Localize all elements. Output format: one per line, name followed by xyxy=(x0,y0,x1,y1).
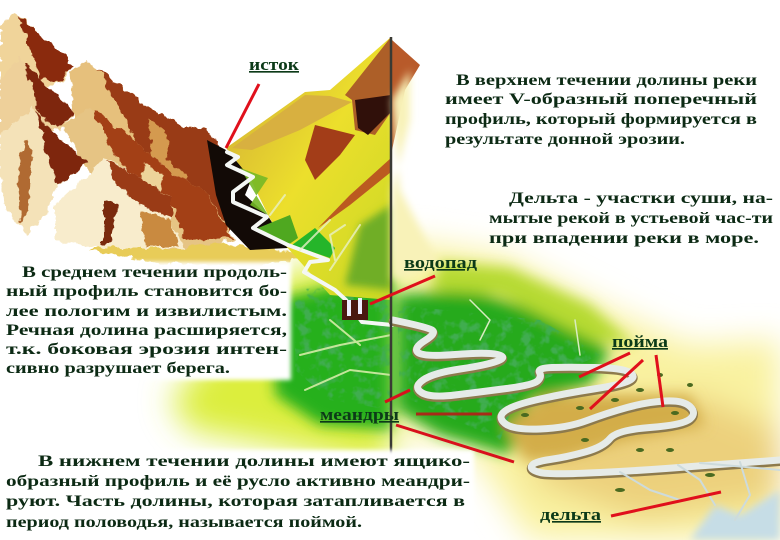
text: upper course xyxy=(445,72,757,148)
text: middle course: т.к. боковая эрозия интен- xyxy=(6,341,287,358)
text: upper course: результате донной эрозии. xyxy=(445,131,685,148)
panel backgrounds for text xyxy=(0,262,474,540)
slope rock faces xyxy=(345,37,391,135)
arrows: пойма xyxy=(579,353,663,409)
foothills xyxy=(90,232,320,268)
label: водопад: водопад xyxy=(404,253,478,272)
text: lower course xyxy=(6,453,470,531)
label: исток: исток xyxy=(249,55,300,74)
label: пойма: пойма xyxy=(612,332,668,351)
peak 3 xyxy=(0,108,90,235)
text: lower course: руют. Часть долины, которая затапливается в xyxy=(6,493,465,510)
waterfall xyxy=(342,298,368,320)
text: middle course: ный профиль становится бо- xyxy=(6,283,287,300)
river: upper course xyxy=(227,152,392,325)
gorge shadow xyxy=(207,140,288,250)
text: delta: Дельта - участки суши, на- xyxy=(509,190,773,207)
green terraces xyxy=(240,168,268,215)
river xyxy=(227,152,780,520)
text: upper course: В верхнем течении долины реки xyxy=(456,72,757,89)
right ridge xyxy=(226,37,391,300)
right slopes xyxy=(226,37,391,300)
front range xyxy=(55,158,185,248)
sea xyxy=(690,490,780,540)
text: delta: мытые рекой в устьевой час-ти xyxy=(489,210,773,227)
arrow: дельта xyxy=(611,492,721,516)
label: дельта: дельта xyxy=(540,505,601,524)
text: middle course: сивно разрушает берега. xyxy=(6,360,230,377)
text: lower course: образный профиль и её русло активно меандри- xyxy=(6,473,470,490)
text: delta xyxy=(489,190,773,247)
peak right of divider xyxy=(392,40,420,150)
text: middle course: В среднем течении продоль- xyxy=(22,264,287,281)
text: lower course: период половодья, называется поймой. xyxy=(6,514,362,531)
river: lower course shadow xyxy=(393,322,780,475)
arrow: водопад xyxy=(370,276,435,304)
shrubs on the floodplain xyxy=(521,373,715,492)
text: upper course: профиль, который формируется в xyxy=(445,111,757,128)
second back range xyxy=(62,108,235,250)
text: middle course: Речная долина расширяется, xyxy=(6,322,287,339)
left mountains xyxy=(0,12,320,268)
text: lower course: В нижнем течении долины имеют ящико- xyxy=(38,453,470,470)
text: delta: при впадении реки в море. xyxy=(489,230,759,247)
text: upper course: имеет V-образный поперечный xyxy=(445,91,757,108)
dark divider line xyxy=(390,37,392,490)
text: middle course: лее пологим и извилистым. xyxy=(6,303,287,320)
peak 1 xyxy=(0,12,73,100)
lower plain: yellow wash xyxy=(170,240,780,540)
label: меандры: меандры xyxy=(320,405,399,424)
forest mottling xyxy=(295,280,600,440)
middle valley: green forest xyxy=(275,262,705,462)
arrow: исток xyxy=(226,84,259,148)
arrows: меандры xyxy=(385,390,514,462)
river: lower course xyxy=(393,320,780,474)
back range xyxy=(70,60,240,238)
peak 2 xyxy=(0,58,75,142)
text: middle course xyxy=(6,264,287,377)
